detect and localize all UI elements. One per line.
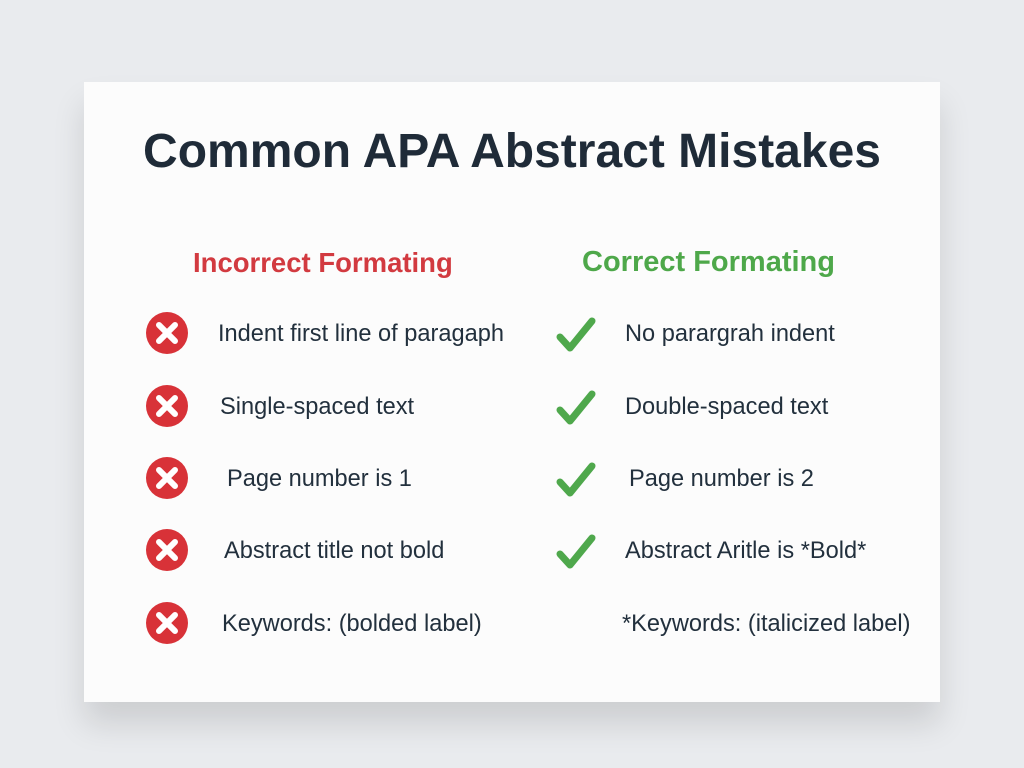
list: incorrect	[146, 312, 504, 644]
text items: Indent first line of paragaph	[218, 321, 504, 347]
title: Common APA Abstract Mistakes	[143, 125, 881, 178]
list: incorrect: Page number is 1	[227, 466, 412, 492]
heading: incorrect: Incorrect Formating	[193, 247, 453, 278]
list: incorrect: Keywords: (bolded label)	[222, 611, 482, 637]
list: correct	[556, 318, 910, 637]
list: correct: Abstract Aritle is *Bold*	[625, 538, 866, 564]
list: incorrect: Single-spaced text	[220, 394, 414, 420]
list: correct: Double-spaced text	[625, 394, 828, 420]
icons: checks	[556, 318, 596, 568]
text items: No parargrah indent	[625, 321, 835, 347]
icons: x marks	[146, 312, 188, 644]
list: incorrect: Abstract title not bold	[224, 538, 444, 564]
heading: correct: Correct Formating	[582, 246, 835, 278]
list: correct: Page number is 2	[629, 466, 814, 492]
list: correct: *Keywords: (italicized label)	[622, 611, 910, 637]
card	[84, 82, 940, 702]
